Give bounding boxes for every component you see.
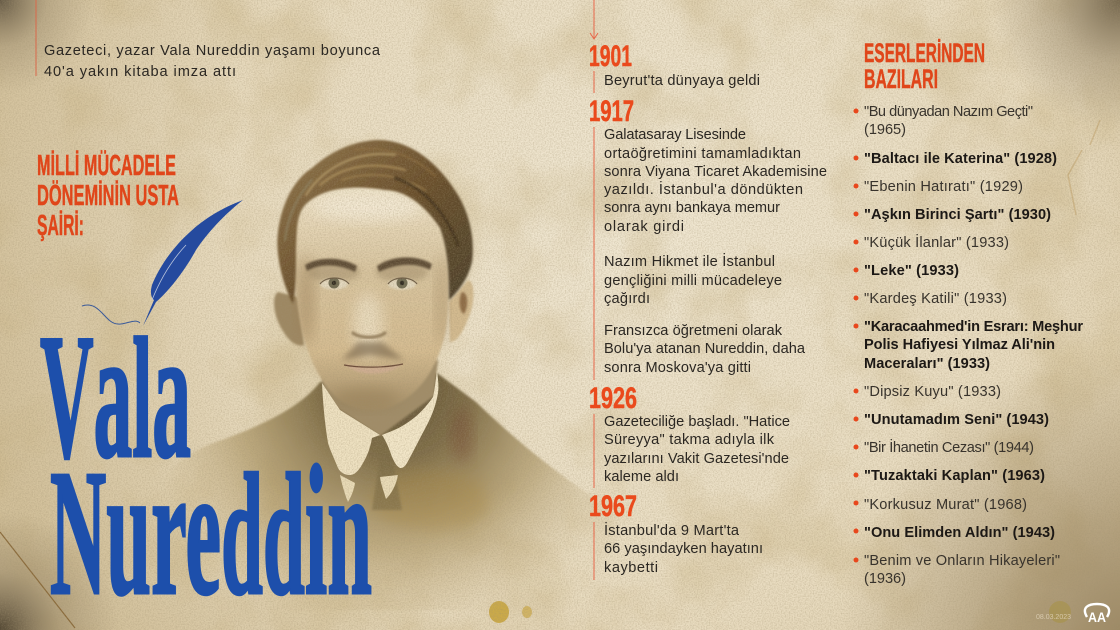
list bullets xyxy=(854,108,858,562)
1926 entry: yazılarını Vakit Gazetesi'nde xyxy=(604,451,789,467)
heading: Milli Mücadele Döneminin Usta Şairi: MİLLİ MÜCADELE xyxy=(37,149,176,182)
heading: Eserlerinden Bazıları: BAZILARI xyxy=(864,64,938,94)
list text: "Bu dünyadan Nazım Geçti" xyxy=(864,104,1033,120)
portrait: ears xyxy=(274,280,474,345)
timeline arrow and line xyxy=(590,0,598,580)
1917 entry: Nazım Hikmet ile İstanbul xyxy=(604,252,775,270)
1917 entry: çağırdı xyxy=(604,291,650,307)
1967 entry: kaybetti xyxy=(604,560,658,576)
list text: "Dipsiz Kuyu" (1933) xyxy=(864,384,1001,400)
list text: "Baltacı ile Katerina" (1928) xyxy=(864,151,1057,167)
1917 entry xyxy=(589,95,827,376)
list text: "Aşkın Birinci Şartı" (1930) xyxy=(864,207,1051,223)
list text: "Unutamadım Seni" (1943) xyxy=(864,412,1049,428)
logo: AA: AA xyxy=(1088,609,1106,625)
intro text block xyxy=(36,0,381,80)
1926 entry: Süreyya" takma adıyla ilk xyxy=(604,432,775,448)
portrait: hair xyxy=(277,140,473,304)
1917 entry: Fransızca öğretmeni olarak xyxy=(604,323,783,339)
date stamp: 08.03.2023 xyxy=(1036,614,1071,621)
title: Vala Nureddin: Nureddin xyxy=(50,428,372,630)
list text xyxy=(864,104,1083,587)
1926 entry: kaleme aldı xyxy=(604,469,679,485)
list text: "Karacaahmed'in Esrarı: Meşhur xyxy=(864,319,1083,335)
1917 entry: sonra Moskova'ya gitti xyxy=(604,360,751,376)
1901 entry xyxy=(589,40,760,89)
heading: Milli Mücadele Döneminin Usta Şairi xyxy=(37,149,179,242)
1917 entry: Galatasaray Lisesinde xyxy=(604,127,746,143)
1926 entry: 1926 xyxy=(589,382,637,415)
1901 entry: Beyrut'ta dünyaya geldi xyxy=(604,73,760,89)
portrait of Vala Nureddin xyxy=(130,140,640,610)
1917 entry: Bolu'ya atanan Nureddin, daha xyxy=(604,341,806,357)
1967 entry: 66 yaşındayken hayatını xyxy=(604,541,763,557)
list text: "Benim ve Onların Hikayeleri" xyxy=(864,553,1060,569)
portrait: neck and face xyxy=(295,185,449,436)
list text: "Onu Elimden Aldın" (1943) xyxy=(864,525,1055,541)
intro text block: Gazeteci, yazar Vala Nureddin yaşamı boyunca xyxy=(44,43,381,59)
list text: (1965) xyxy=(864,122,906,138)
logo: AA xyxy=(1085,604,1109,625)
heading: Eserlerinden Bazıları: ESERLERİNDEN xyxy=(864,38,985,68)
1901 entry: 1901 xyxy=(589,40,632,73)
1967 entry xyxy=(589,490,763,576)
heading: Milli Mücadele Döneminin Usta Şairi: DÖNEMİNİN USTA xyxy=(37,179,179,212)
list text: (1936) xyxy=(864,571,906,587)
1917 entry: gençliğini milli mücadeleye xyxy=(604,273,782,289)
1926 entry: Gazeteciliğe başladı. "Hatice xyxy=(604,414,790,430)
list text: "Bir İhanetin Cezası" (1944) xyxy=(864,438,1034,456)
intro text block: 40'a yakın kitaba imza attı xyxy=(44,64,236,80)
timeline xyxy=(589,0,827,580)
portrait: brows, eyes, nose and mouth xyxy=(305,257,432,374)
1917 entry: 1917 xyxy=(589,95,634,128)
list text: "Kardeş Katili" (1933) xyxy=(864,291,1007,307)
title: Vala Nureddin: Vala xyxy=(40,291,191,497)
portrait: suit xyxy=(130,373,640,610)
1917 entry: olarak girdi xyxy=(604,219,684,235)
heading: Eserlerinden Bazıları xyxy=(864,38,985,94)
portrait: tie xyxy=(372,438,402,510)
list text: "Korkusuz Murat" (1968) xyxy=(864,497,1027,513)
list text: "Tuzaktaki Kaplan" (1963) xyxy=(864,468,1045,484)
title: Vala Nureddin xyxy=(40,291,372,630)
1917 entry: ortaöğretimini tamamladıktan xyxy=(604,146,801,162)
1917 entry: sonra aynı bankaya memur xyxy=(604,200,780,216)
icon: blue quill feather xyxy=(82,200,243,326)
list text: "Küçük İlanlar" (1933) xyxy=(864,233,1009,251)
1917 entry: sonra Viyana Ticaret Akademisine xyxy=(604,164,827,180)
1967 entry: İstanbul'da 9 Mart'ta xyxy=(604,521,740,539)
list text: Polis Hafiyesi Yılmaz Ali'nin xyxy=(864,337,1055,353)
list text: Maceraları" (1933) xyxy=(864,356,990,372)
1967 entry: 1967 xyxy=(589,490,637,523)
list text: "Ebenin Hatıratı" (1929) xyxy=(864,179,1023,195)
list of works xyxy=(854,104,1083,587)
heading: Milli Mücadele Döneminin Usta Şairi: ŞAİRİ: xyxy=(37,210,84,242)
portrait: collar xyxy=(322,370,438,502)
1926 entry xyxy=(589,382,790,485)
list text: "Leke" (1933) xyxy=(864,263,959,279)
1917 entry: yazıldı. İstanbul'a döndükten xyxy=(604,180,803,198)
